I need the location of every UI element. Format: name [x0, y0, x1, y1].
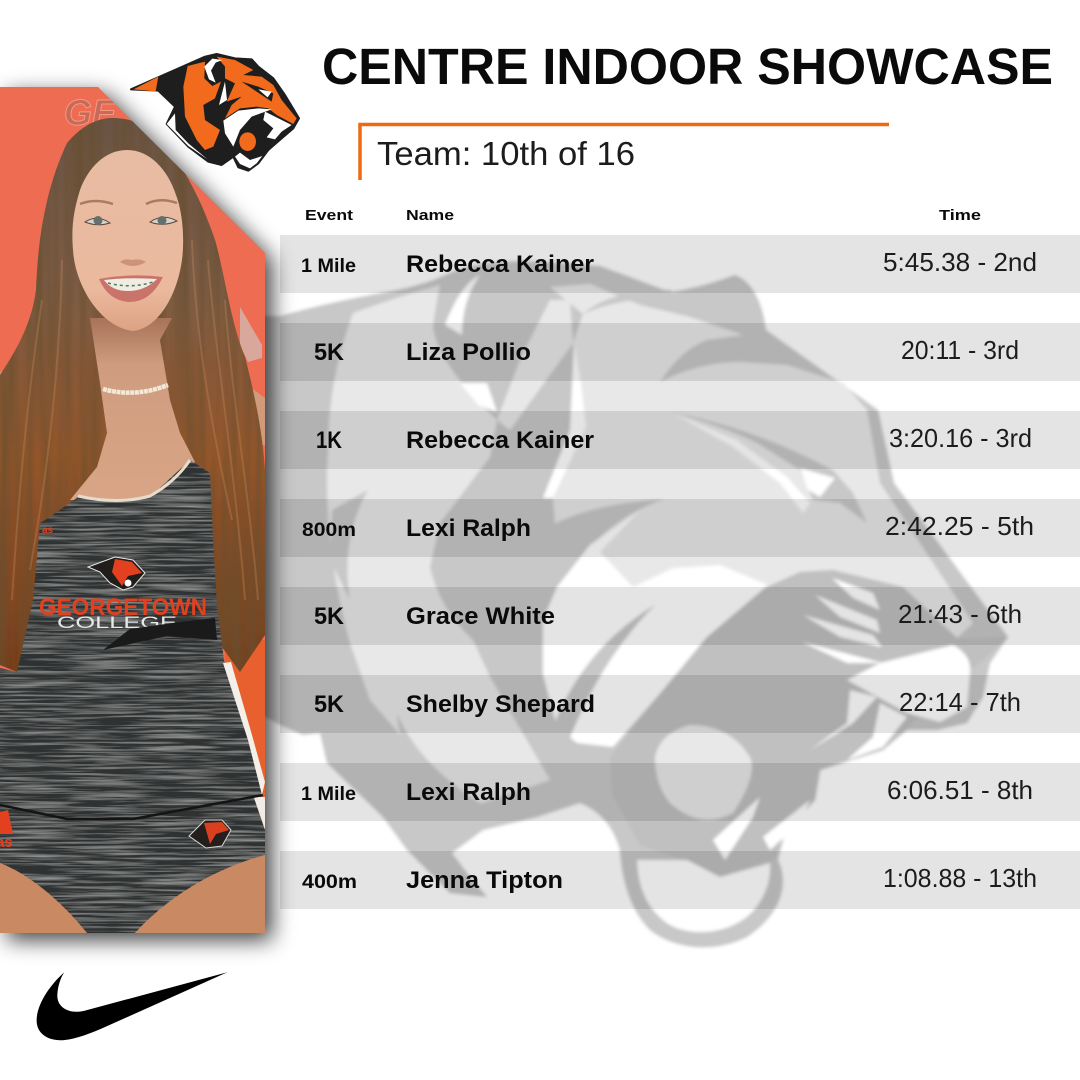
- row: 1K Rebecca Kainer: 3:20.16 - 3rd: [889, 423, 1032, 453]
- table header: Time: [939, 207, 981, 224]
- row: 1 Mile Rebecca Kainer: 5:45.38 - 2nd: [883, 247, 1037, 277]
- running top: [0, 460, 263, 818]
- row: 5K Shelby Shepard: Shelby Shepard: [406, 691, 595, 718]
- row: 5K Grace White: 21:43 - 6th: [898, 599, 1022, 629]
- team result subtitle: Team: 10th of 16: [377, 135, 635, 172]
- row: 400m Jenna Tipton: Jenna Tipton: [406, 867, 563, 894]
- briefs: [0, 795, 265, 933]
- row: 5K Grace White: [280, 587, 1080, 645]
- necklace: [103, 385, 168, 393]
- icon: nike swoosh: [37, 972, 227, 1040]
- table header: Event: [305, 207, 353, 224]
- hair: [0, 118, 265, 672]
- row: 800m Lexi Ralph: 800m: [302, 520, 356, 541]
- face: [72, 150, 183, 331]
- table header: [305, 207, 981, 224]
- row: 5K Liza Pollio: [280, 323, 1080, 381]
- row: 400m Jenna Tipton: 400m: [302, 872, 357, 893]
- row: 1 Mile Rebecca Kainer: Rebecca Kainer: [406, 251, 594, 278]
- table header: Name: [406, 207, 454, 224]
- row: 800m Lexi Ralph: Lexi Ralph: [406, 515, 531, 542]
- top adidas mark: as: [42, 525, 54, 536]
- row: 800m Lexi Ralph: [280, 499, 1080, 557]
- row: 1 Mile Lexi Ralph: [280, 763, 1080, 821]
- background watermark: grey tiger head: [262, 261, 1008, 947]
- legs: [0, 855, 265, 933]
- orange bracket accent: [360, 124, 889, 180]
- row: 1 Mile Rebecca Kainer: 1 Mile: [301, 256, 356, 277]
- hair highlights: [12, 240, 258, 600]
- panel shadow: [7, 94, 272, 940]
- shoulders: [0, 366, 265, 445]
- shirt logo: [88, 557, 145, 590]
- row: 5K Liza Pollio: 5K: [314, 339, 345, 366]
- shirt lettering: GEORGETOWN: [39, 594, 207, 621]
- panel: athlete photo: [0, 87, 265, 933]
- row: 1K Rebecca Kainer: 1K: [316, 427, 343, 454]
- row: 5K Shelby Shepard: 5K: [314, 691, 345, 718]
- icon: tiger logo: [131, 54, 299, 171]
- backdrop logo lettering: GE: [64, 92, 117, 133]
- row: 5K Shelby Shepard: 22:14 - 7th: [899, 687, 1021, 717]
- row: 5K Grace White: Grace White: [406, 603, 555, 630]
- shirt fold shadow: [103, 618, 217, 650]
- row: 1 Mile Lexi Ralph: Lexi Ralph: [406, 779, 531, 806]
- row: 5K Shelby Shepard: [280, 675, 1080, 733]
- row: 400m Jenna Tipton: 1:08.88 - 13th: [883, 863, 1037, 893]
- results table: [280, 235, 1080, 909]
- row: 1K Rebecca Kainer: [280, 411, 1080, 469]
- briefs tiger logo: [189, 820, 231, 848]
- row: 5K Liza Pollio: Liza Pollio: [406, 339, 531, 366]
- row: 400m Jenna Tipton: [280, 851, 1080, 909]
- title: CENTRE INDOOR SHOWCASE: [322, 38, 1053, 95]
- row: 1 Mile Lexi Ralph: 1 Mile: [301, 784, 356, 805]
- row: 5K Liza Pollio: 20:11 - 3rd: [901, 335, 1019, 365]
- row: 1 Mile Rebecca Kainer: [280, 235, 1080, 293]
- row: 1 Mile Lexi Ralph: 6:06.51 - 8th: [887, 775, 1033, 805]
- row: 5K Grace White: 5K: [314, 603, 345, 630]
- shirt lettering second line: COLLEGE: [57, 613, 177, 632]
- row: 800m Lexi Ralph: 2:42.25 - 5th: [885, 511, 1034, 541]
- adidas mark: [0, 810, 13, 851]
- neck and chest: [70, 318, 195, 500]
- row: 1K Rebecca Kainer: Rebecca Kainer: [406, 427, 594, 454]
